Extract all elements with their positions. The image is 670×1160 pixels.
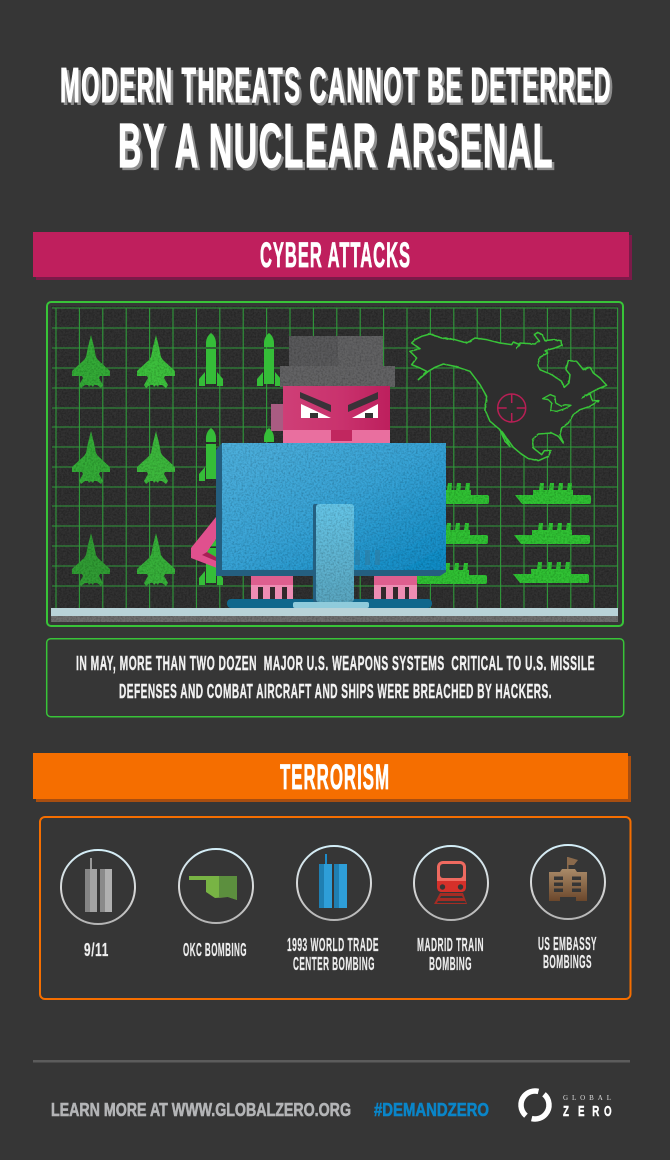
icons: ships: [411, 483, 591, 584]
hat: [280, 336, 395, 387]
logo: Global Zero: ZERO: [563, 1103, 612, 1120]
panel: terrorism events: [40, 817, 630, 999]
event: Madrid train bombing: [414, 846, 488, 974]
event: OKC bombing: [179, 849, 253, 960]
heading: cyber attacks: CYBER ATTACKS: [260, 236, 411, 275]
icons: fighter jets: [72, 335, 175, 586]
event: US embassy bombings: US EMBASSY: [538, 934, 597, 954]
event: US embassy bombings: [531, 845, 605, 972]
panel: terrorism events: MADRID TRAIN: [417, 935, 484, 955]
text block: cyber attack fact: [47, 639, 624, 717]
computer monitor: [216, 443, 446, 608]
logo: Global Zero: GLOBAL: [563, 1094, 611, 1102]
heading: terrorism: [33, 753, 631, 802]
map: North America with target: [408, 332, 607, 464]
eyes and brows: [300, 392, 378, 418]
legs: [251, 576, 417, 599]
footer: hashtag: #DEMANDZERO: [374, 1100, 489, 1120]
panel: terrorism events: OKC BOMBING: [183, 940, 247, 960]
icons: missiles: [199, 333, 281, 585]
event: 9/11: 9/11: [84, 940, 109, 960]
event: 9/11: [61, 850, 135, 960]
heading: terrorism: TERRORISM: [280, 758, 390, 797]
footer: learn more link: LEARN MORE AT WWW.GLOBALZERO.ORG: [51, 1100, 351, 1120]
event: US embassy bombings: BOMBINGS: [543, 952, 592, 972]
face: [283, 386, 390, 444]
panel: cyber attack illustration: [47, 302, 623, 626]
panel: terrorism events: 1993 WORLD TRADE: [287, 935, 379, 955]
floor strip: [51, 608, 618, 622]
heading: cyber attacks: [33, 232, 632, 280]
logo: Global Zero: [515, 1085, 612, 1125]
title: [60, 59, 614, 184]
panel: terrorism events: CENTER BOMBING: [293, 954, 375, 974]
event: Madrid train bombing: BOMBING: [429, 954, 472, 974]
event: 1993 World Trade Center bombing: [287, 846, 379, 974]
ear: [271, 404, 284, 431]
figure: hacker in hat: [191, 336, 417, 599]
hand: [191, 517, 217, 568]
